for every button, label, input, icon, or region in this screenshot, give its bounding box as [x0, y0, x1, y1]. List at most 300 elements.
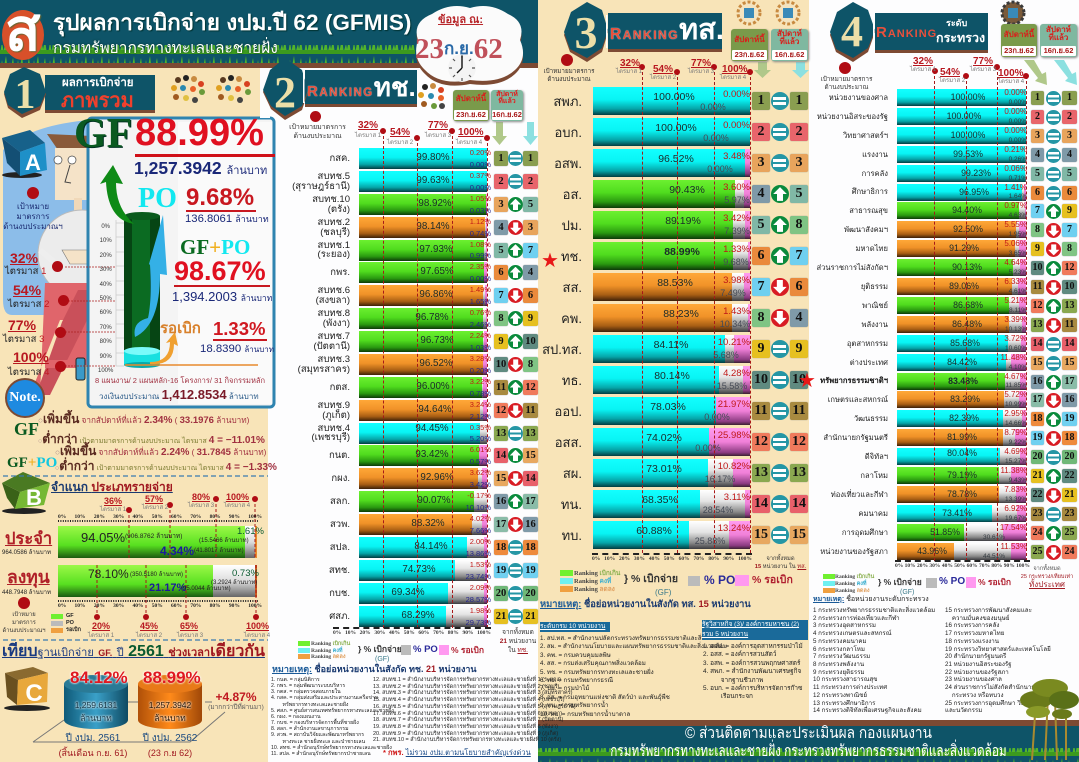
row พลังงาน: พลังงาน [861, 320, 888, 329]
row ออป.: 0.00% [704, 412, 730, 422]
axis: 80% [448, 630, 459, 636]
row ทช.: 88.99% [664, 246, 700, 258]
row กผง.: กผง. [331, 473, 350, 484]
row ศึกษาธิการ: 6 [1035, 186, 1040, 198]
row สบทช.5: 2 [498, 176, 504, 187]
unit count note: 21 หน่วยงาน [500, 638, 536, 645]
row อิสระ: 100.00% [947, 111, 981, 121]
row ยุติธรรม: 4.61% [1009, 288, 1027, 294]
row สบทช.1: 5 [498, 244, 504, 256]
row สปล.: 18 [496, 542, 506, 553]
section 1 subheading: ภาพรวม [61, 90, 134, 112]
row พัฒนาสังคม [810, 221, 1079, 238]
row สาธารณสุข: 0.97% [1004, 201, 1027, 210]
ranking rows [540, 87, 810, 550]
row ออป.: 78.03% [650, 401, 686, 413]
row สพภ.: 1 [758, 93, 764, 108]
row สบทช.2: 1.12% [470, 217, 491, 226]
quarter 4 marker: ไตรมาส 4 [8, 367, 49, 378]
panel 1: overview [2, 67, 277, 758]
ministry list right: 22 หน่วยงานของรัฐสภา [945, 669, 1009, 676]
row สบทช.3: 0.20% [470, 366, 491, 374]
row สบทช.3: 10 [496, 359, 506, 370]
row ทน. [540, 490, 810, 518]
row สวพ.: 17 [496, 519, 506, 530]
row สบทช.1: (ระยอง) [318, 249, 350, 260]
row สทช.: 19 [496, 565, 506, 576]
unit list right: 13. สบทช.2 = สำนักงานบริหารจัดการทรัพยากรทางทะเลและชายฝั่งที่ 2 (ชลบุรี) [373, 684, 559, 690]
row สป.ทส.: 9 [796, 341, 802, 356]
department list: 4. สส. = กรมส่งเสริมคุณภาพสิ่งแวดล้อม [540, 660, 646, 667]
row วัฒนธรรม: 82.39% [949, 413, 979, 423]
row ทธ.: ทธ. [562, 372, 582, 388]
ministry list right: 21 หน่วยงานอิสระของรัฐ [945, 661, 1012, 668]
row สปล.: 13.86% [466, 548, 491, 558]
row กบช.: 28.57% [466, 594, 491, 604]
bottom quarter labels: 45% [140, 621, 158, 631]
quarter 4 marker: 100% [13, 349, 49, 365]
unit count note: ทั้งประเทศ [1029, 580, 1065, 589]
2561 caption: ปี งปม. 2561 [66, 733, 120, 744]
quarter target lines: ไตรมาส 2 [939, 78, 965, 84]
row อสพ.: 3.48% [723, 151, 750, 162]
row สบทช.10: 0.03% [470, 206, 491, 214]
row สปล.: สปล. [330, 542, 350, 553]
panel 2: DMCR ranking [260, 58, 576, 757]
row คพ.: คพ. [561, 310, 582, 326]
chart legend: Ranking เบิกเกิน Ranking คงที่ Ranking ลดลง [835, 574, 874, 594]
row สปล.: 18 [525, 542, 536, 553]
footnote heading: หมายเหตุ: ชื่อย่อหน่วยงานในสังกัด ทช. 21 หน่วยงาน [272, 664, 477, 674]
row อุดมศึกษา: 30.61% [983, 534, 1005, 540]
row ต่างประเทศ: 11.48% [1000, 353, 1027, 362]
bottom quarter labels: ไตรมาส 3 [177, 633, 203, 639]
top axis: 10% [75, 514, 86, 520]
axis: 20% [619, 556, 630, 562]
row ปม. [540, 211, 810, 239]
row ศสภ. [270, 606, 540, 627]
quarter 1 marker [4, 250, 63, 277]
2562 caption: ปี งปม. 2562 [143, 733, 197, 744]
target label: ด้านงบประมาณ [547, 76, 591, 83]
2562 amount [148, 700, 192, 723]
ministry list left: 2 กระทรวงการท่องเที่ยวและกีฬา [813, 615, 900, 622]
row อุตสาหกรรม: 10.60% [1005, 344, 1027, 352]
row อุดมศึกษา: 17.54% [1000, 523, 1027, 532]
row กพร. [270, 262, 540, 283]
top axis: 80% [210, 514, 221, 520]
row กลาโหม: 9.43% [1009, 476, 1027, 484]
row สบทช.6: สบทช.6 [318, 285, 350, 296]
ministry list left: 6 กระทรวงกลาโหม [813, 646, 865, 653]
row สลก.: 90.07% [417, 495, 451, 506]
section 2 header badge [263, 58, 417, 120]
row ทรัพยากรธรรมชาติ: 83.48% [948, 376, 978, 386]
2561 percent: 84.12% [70, 668, 128, 687]
result panel frame [88, 118, 274, 407]
row อส.: 3.60% [723, 182, 750, 193]
row กพร.: 0.00% [470, 274, 491, 282]
last-week tag: 16ก.ย.62 [775, 50, 804, 59]
ministry list left: 8 กระทรวงพลังงาน [813, 661, 864, 668]
row มหาดไทย: มหาดไทย [856, 244, 888, 253]
row วิทยาศาสตร์: 3 [1067, 130, 1072, 141]
row สบทช.5: 0.00% [470, 182, 491, 192]
row สบทช.4: 0.35% [470, 422, 491, 432]
chart legend: % PO [413, 644, 438, 655]
row อิสระ: 0.00% [1004, 107, 1027, 116]
row ทธ.: 80.14% [654, 370, 690, 382]
ministry list right: 17 กระทรวงมหาดไทย [945, 630, 1004, 637]
row ทธ. [540, 366, 810, 394]
row ต่างประเทศ: 4.10% [1009, 364, 1027, 370]
row อสส. [540, 428, 810, 456]
quarter target lines: 100% [458, 127, 484, 138]
this-week tag: สัปดาห์นี้ [456, 94, 486, 103]
row คมนาคม: 23 [1032, 508, 1042, 519]
row สวพ.: 88.32% [411, 518, 445, 529]
row กผง.: 15 [496, 473, 506, 484]
row สบทช.5: 0.37% [470, 171, 491, 180]
row การคลัง: 99.23% [961, 168, 991, 178]
unit list right: 12. สบทช.1 = สำนักงานบริหารจัดการทรัพยากรทางทะเลและชายฝั่งที่ 1 (ระยอง) [373, 677, 561, 683]
department list: 6. ทธ. = กรมทรัพยากรธรณี [540, 677, 613, 684]
cube C [4, 667, 50, 711]
orange arrow [150, 332, 178, 364]
row แรงงาน: 0.26% [1009, 156, 1027, 162]
row สผ.: สผ. [563, 466, 582, 480]
row ทน.: 3.11% [724, 492, 750, 503]
row สผ.: 16.17% [705, 474, 735, 484]
row ทน.: 68.35% [642, 494, 678, 506]
quarter target lines: 77% [428, 120, 448, 131]
axis: 60% [418, 630, 429, 636]
investment label: ลงทุน [7, 567, 50, 587]
change vs last year: +4.87% [215, 690, 257, 704]
this-week tag [1001, 24, 1037, 57]
row สบทช.9: 94.64% [418, 404, 452, 415]
row นายก: 19 [1032, 432, 1042, 443]
2561 caption [59, 732, 127, 758]
row กผง.: 3.42% [470, 480, 491, 488]
2562 amount: 1,257.3942 [149, 700, 191, 710]
row สพภ.: 0.00% [723, 89, 750, 100]
state enterprise list: 2. อสส. = องค์การสวนสัตว์ [703, 651, 776, 658]
row การคลัง [810, 165, 1079, 182]
bottom axis: 40% [132, 603, 143, 609]
section 4 header badge [830, 2, 988, 62]
axis: 70% [979, 563, 990, 569]
row อส.: 5.97% [724, 195, 750, 205]
row สบทช.3: 8 [528, 359, 533, 370]
row สวพ.: 16 [525, 519, 536, 530]
state enterprise list [703, 643, 803, 702]
row กตส.: 12 [525, 382, 536, 393]
row กพร.: 6 [498, 267, 504, 278]
top quarter labels: 100% [226, 492, 249, 502]
quarter target lines: 77% [691, 58, 711, 69]
row ศาล: 0.00% [1009, 98, 1027, 106]
row อุดมศึกษา [810, 524, 1079, 541]
row ศึกษาธิการ: 1.41% [1004, 182, 1027, 192]
row กผง.: 14 [525, 473, 536, 484]
row พัฒนาสังคม: 5.55% [1004, 220, 1027, 229]
axis: 30% [929, 563, 940, 569]
department list: 9. ทน. = กรมทรัพยากรน้ำ [540, 702, 608, 709]
row คมนาคม: 73.41% [942, 508, 972, 518]
row ศสภ.: 21 [525, 611, 536, 622]
quarter target lines: 32% [620, 58, 640, 69]
row สาธารณสุข: สาธารณสุข [849, 206, 888, 215]
unit count note: ใน ทช. [508, 647, 528, 654]
quarter target lines: ไตรมาส 1 [616, 69, 642, 75]
row กตส.: 11 [496, 382, 506, 393]
unit list right: 14. สบทช.3 = สำนักงานบริหารจัดการทรัพยากรทางทะเลและชายฝั่งที่ 3 (สมุทรสาคร) [373, 690, 572, 696]
axis: 40% [649, 556, 660, 562]
department sub-heading: ระดับกรม 10 หน่วยงาน [540, 623, 605, 630]
investment bar values: (3.2924 ล้านบาท) [211, 580, 257, 586]
quarter target lines: 54% [940, 67, 960, 78]
row คมนาคม: 6.92% [1004, 504, 1027, 513]
unit list right: 17. สบทช.6 = สำนักงานบริหารจัดการทรัพยากรทางทะเลและชายฝั่งที่ 6 (สงขลา) [373, 711, 562, 717]
row ส่วนราชการ: ส่วนราชการไม่สังกัดฯ [816, 263, 888, 272]
row เกษตร: เกษตรและสหกรณ์ [828, 395, 888, 404]
GF+PO note 2: ○ต่ำกว่า เป้าตามมาตรการด้านงบประมาณ ไตรมาส 4 = −1.33% [55, 459, 277, 473]
chart legend: % PO [939, 576, 965, 587]
department list: 5. ทช. = กรมทรัพยากรทางทะเลและชายฝั่ง [540, 669, 654, 676]
quarter target lines: ไตรมาส 1 [355, 133, 381, 139]
row ดิจิทัล: ดีจิทัลฯ [865, 452, 888, 461]
date value: 23ก.ย.62 [415, 33, 503, 65]
axis: 90% [462, 630, 473, 636]
row อุดมศึกษา: การอุดมศึกษา [842, 528, 888, 537]
footnote heading: หมายเหตุ: ชื่อหน่วยงานระดับกระทรวง [813, 596, 929, 603]
row สบทช.5: 2 [528, 176, 533, 187]
row สบทช.1: 1.08% [470, 240, 491, 248]
row สบทช.6: 7 [498, 290, 504, 301]
row วัฒนธรรม: วัฒนธรรม [854, 414, 888, 423]
department list [540, 635, 728, 719]
row อสพ.: อสพ. [554, 156, 582, 170]
date label: ข้อมูล ณ: [438, 14, 483, 26]
row ต่างประเทศ [810, 354, 1079, 371]
chart legend: Ranking เบิกเกิน Ranking คงที่ Ranking ลดลง [574, 570, 620, 593]
row วัฒนธรรม: 2.95% [1004, 409, 1027, 418]
chart legend: } % เบิกจ่าย [878, 577, 922, 587]
top axis: 90% [229, 514, 240, 520]
row ต่างประเทศ: ต่างประเทศ [850, 358, 888, 367]
row อสพ.: 3 [758, 155, 764, 170]
target label: มาตรการ [17, 212, 49, 221]
unit list right: 20. สบทช.9 = สำนักงานบริหารจัดการทรัพยากรทางทะเลและชายฝั่งที่ 9 (ภูเก็ต) [373, 731, 558, 737]
quarter target lines: 54% [653, 64, 673, 75]
row ศาล [810, 89, 1079, 106]
row สบทช.7: 10 [525, 336, 536, 347]
GF+PO note 1: ○เพิ่มขึ้น จากสัปดาห์ที่แล้ว 2.24% ( 31.7845 ล้านบาท) [55, 444, 266, 458]
row แรงงาน: 4 [1035, 149, 1040, 160]
row เกษตร: 16 [1064, 394, 1074, 405]
row สบทช.10: 5 [528, 199, 533, 210]
row สบทช.7: 2.24% [470, 331, 491, 340]
row วิทยาศาสตร์: วิทยาศาสตร์ฯ [843, 131, 888, 140]
section 4 title [876, 17, 988, 47]
row ดิจิทัล: 15.27% [1005, 458, 1027, 464]
row รัฐสภา: 11.53% [1000, 542, 1027, 551]
star marker ทช.: ★ [541, 248, 559, 272]
axis: 90% [723, 556, 734, 562]
state enterprise sub-heading [702, 620, 808, 640]
row สผ. [540, 459, 810, 487]
chart legend: } % เบิกจ่าย [624, 573, 678, 585]
quarter target lines [600, 58, 765, 553]
investment bar values: 0.73% [232, 568, 259, 579]
ministry list right: 15 กระทรวงการพัฒนาสังคมและ [945, 607, 1032, 614]
row ส่วนราชการ: 10 [1032, 262, 1042, 273]
section B heading: จำแนก ประเภทรายจ่าย [51, 480, 173, 494]
row อสพ.: 0.00% [707, 164, 733, 174]
last-week tag [491, 90, 523, 121]
department list: 2. สผ. = สำนักงานนโยบายและแผนทรัพยากรธรรมชาติและสิ่งแวดล้อม [540, 643, 727, 650]
state enterprise list: 3. อสพ. = องค์การสวนพฤกษศาสตร์ [703, 660, 800, 667]
quarter target lines: ไตรมาส 3 [688, 69, 714, 75]
top axis: 50% [152, 514, 163, 520]
people icon [418, 83, 445, 109]
row คพ.: 1.43% [723, 306, 750, 317]
2562 caption [142, 732, 197, 758]
panel 4: ministry ranking [810, 0, 1079, 762]
row สาธารณสุข [810, 202, 1079, 219]
row ทบ.: ทบ. [562, 528, 582, 542]
top axis: 0% [58, 514, 66, 520]
row มหาดไทย: 9 [1035, 243, 1040, 254]
row ออป.: 11 [792, 403, 806, 418]
last-week tag [1040, 24, 1077, 57]
investment amount: 448.7948 ล้านบาท [2, 590, 51, 596]
row สป.ทส.: สป.ทส. [542, 342, 582, 356]
row มหาดไทย: 91.29% [949, 243, 979, 253]
row มหาดไทย: 3.65% [1009, 250, 1027, 256]
row กพร.: กพร. [330, 267, 350, 278]
unit list left: 11. สปล. = สำนักอนุรักษ์ทรัพยากรป่าชายเลน [271, 751, 371, 757]
row อส.: 90.43% [669, 184, 705, 196]
row ทรัพยากรธรรมชาติ: 4.67% [1004, 372, 1027, 380]
row กลาโหม: 22 [1064, 470, 1074, 481]
row สบทช.5 [292, 171, 538, 192]
target legend: ด้านงบประมาณฯ [2, 628, 46, 634]
row นายก: 9.22% [1009, 438, 1027, 446]
row ดิจิทัล: 20 [1032, 451, 1042, 462]
recurring bar values: 4.34% [160, 544, 194, 558]
bottom quarter labels: 100% [246, 621, 269, 631]
row พลังงาน: 86.48% [952, 319, 982, 329]
row มหาดไทย: 5.06% [1004, 239, 1027, 248]
row สบทช.10: (ตรัง) [328, 204, 350, 214]
axis: 0% [333, 630, 341, 636]
row อส.: 4 [758, 186, 764, 201]
pending label: รอเบิก [160, 320, 201, 337]
green arrow [100, 165, 134, 224]
row กตส.: กตส. [330, 382, 350, 393]
quarter target lines: ไตรมาส 4 [456, 140, 482, 146]
row สาธารณสุข: 4.63% [1009, 212, 1027, 218]
state enterprise sub-heading: รัฐวิสาหกิจ (3)/ องค์การมหาชน (2) [702, 621, 799, 628]
row อุตสาหกรรม: 3.72% [1004, 334, 1027, 343]
recurring bar values: (906.8762 ล้านบาท) [125, 533, 182, 540]
row ศึกษาธิการ: 1.64% [1009, 193, 1027, 200]
top quarter labels: ไตรมาส 1 [100, 507, 126, 513]
bottom axis: 100% [248, 603, 262, 609]
row อบก.: 100.00% [655, 122, 697, 134]
this-week tag: สัปดาห์นี้ [1004, 30, 1034, 39]
row สบทช.3: 3.28% [470, 354, 491, 363]
budget total: วงเงินงบประมาณ 1,412.8534 ล้านบาท [99, 387, 259, 402]
axis [592, 553, 752, 562]
row อบก.: 2 [758, 124, 764, 139]
rank arrows [754, 62, 809, 78]
row พาณิชย์: 5.21% [1004, 296, 1027, 305]
bottom quarter labels: ไตรมาส 2 [136, 633, 162, 639]
bottom axis: 70% [190, 603, 201, 609]
row สบทช.9: สบทช.9 [318, 400, 350, 411]
row มหาดไทย: 8 [1067, 243, 1072, 254]
recurring bar values: 1.61% [237, 526, 264, 537]
axis: 20% [917, 563, 928, 569]
chart legend: Ranking เบิกเกิน Ranking คงที่ Ranking ลดลง [311, 641, 350, 660]
row ยุติธรรม: 89.06% [949, 281, 979, 291]
row อสพ.: 96.52% [658, 153, 694, 165]
row คมนาคม: 19.67% [1005, 514, 1027, 522]
row อบก. [540, 118, 810, 146]
PO amount: 136.8061 ล้านบาท [185, 213, 269, 225]
row สบทช.8: 8 [498, 313, 504, 324]
cube A: A [25, 150, 41, 175]
section 2 header badge: 2 [274, 68, 296, 117]
row ทช. [540, 242, 810, 270]
row สบทช.3: (สมุทรสาคร) [298, 364, 350, 374]
row วิทยาศาสตร์: 0.00% [1004, 126, 1027, 135]
ministry list left: 3 กระทรวงอุตสาหกรรม [813, 622, 876, 629]
2561 amount [74, 700, 118, 723]
GF note 2: ○ต่ำกว่า เป้าตามมาตรการด้านงบประมาณ ไตรมาส 4 = −11.01% [38, 432, 265, 446]
row ยุติธรรม: 11 [1033, 281, 1042, 292]
unit list left: 10. สทช. = สำนักอนุรักษ์ทรัพยากรทางทะเลและชายฝั่ง [271, 745, 392, 751]
row พัฒนาสังคม: 92.50% [953, 224, 983, 234]
target legend [2, 597, 46, 634]
ministry list left: 12 กระทรวงพาณิชย์ [813, 692, 867, 699]
top axis: 100% [248, 514, 262, 520]
this-week tag: 23ก.ย.62 [735, 50, 764, 59]
last-week tag: ที่แล้ว [780, 37, 799, 46]
axis: 60% [967, 563, 978, 569]
row สบทช.1: สบทช.1 [318, 240, 350, 250]
quarter target lines: 100% [998, 68, 1024, 79]
bottom axis: 0% [58, 603, 66, 609]
row สบทช.7: (ปัตตานี) [313, 340, 350, 352]
row ศาล: หน่วยงานของศาล [829, 93, 888, 102]
department list: 8. อส. = กรมอุทยานแห่งชาติ สัตว์ป่า และพันธุ์พืช [540, 694, 670, 701]
row สบทช.9: 11 [526, 405, 535, 416]
note badge: Note. [9, 390, 41, 405]
row ท่องเที่ยว: 22 [1032, 489, 1042, 500]
row ท่องเที่ยว: 7.83% [1004, 485, 1027, 494]
row ต่างประเทศ: 84.42% [947, 357, 977, 367]
row ทน.: 28.54% [703, 505, 733, 515]
chart legend: (GF) [900, 589, 914, 596]
row การคลัง: 0.71% [1009, 174, 1027, 182]
row กบช.: 20 [496, 588, 506, 599]
row สพภ.: 100.00% [653, 91, 695, 103]
bottom axis: 30% [113, 603, 124, 609]
